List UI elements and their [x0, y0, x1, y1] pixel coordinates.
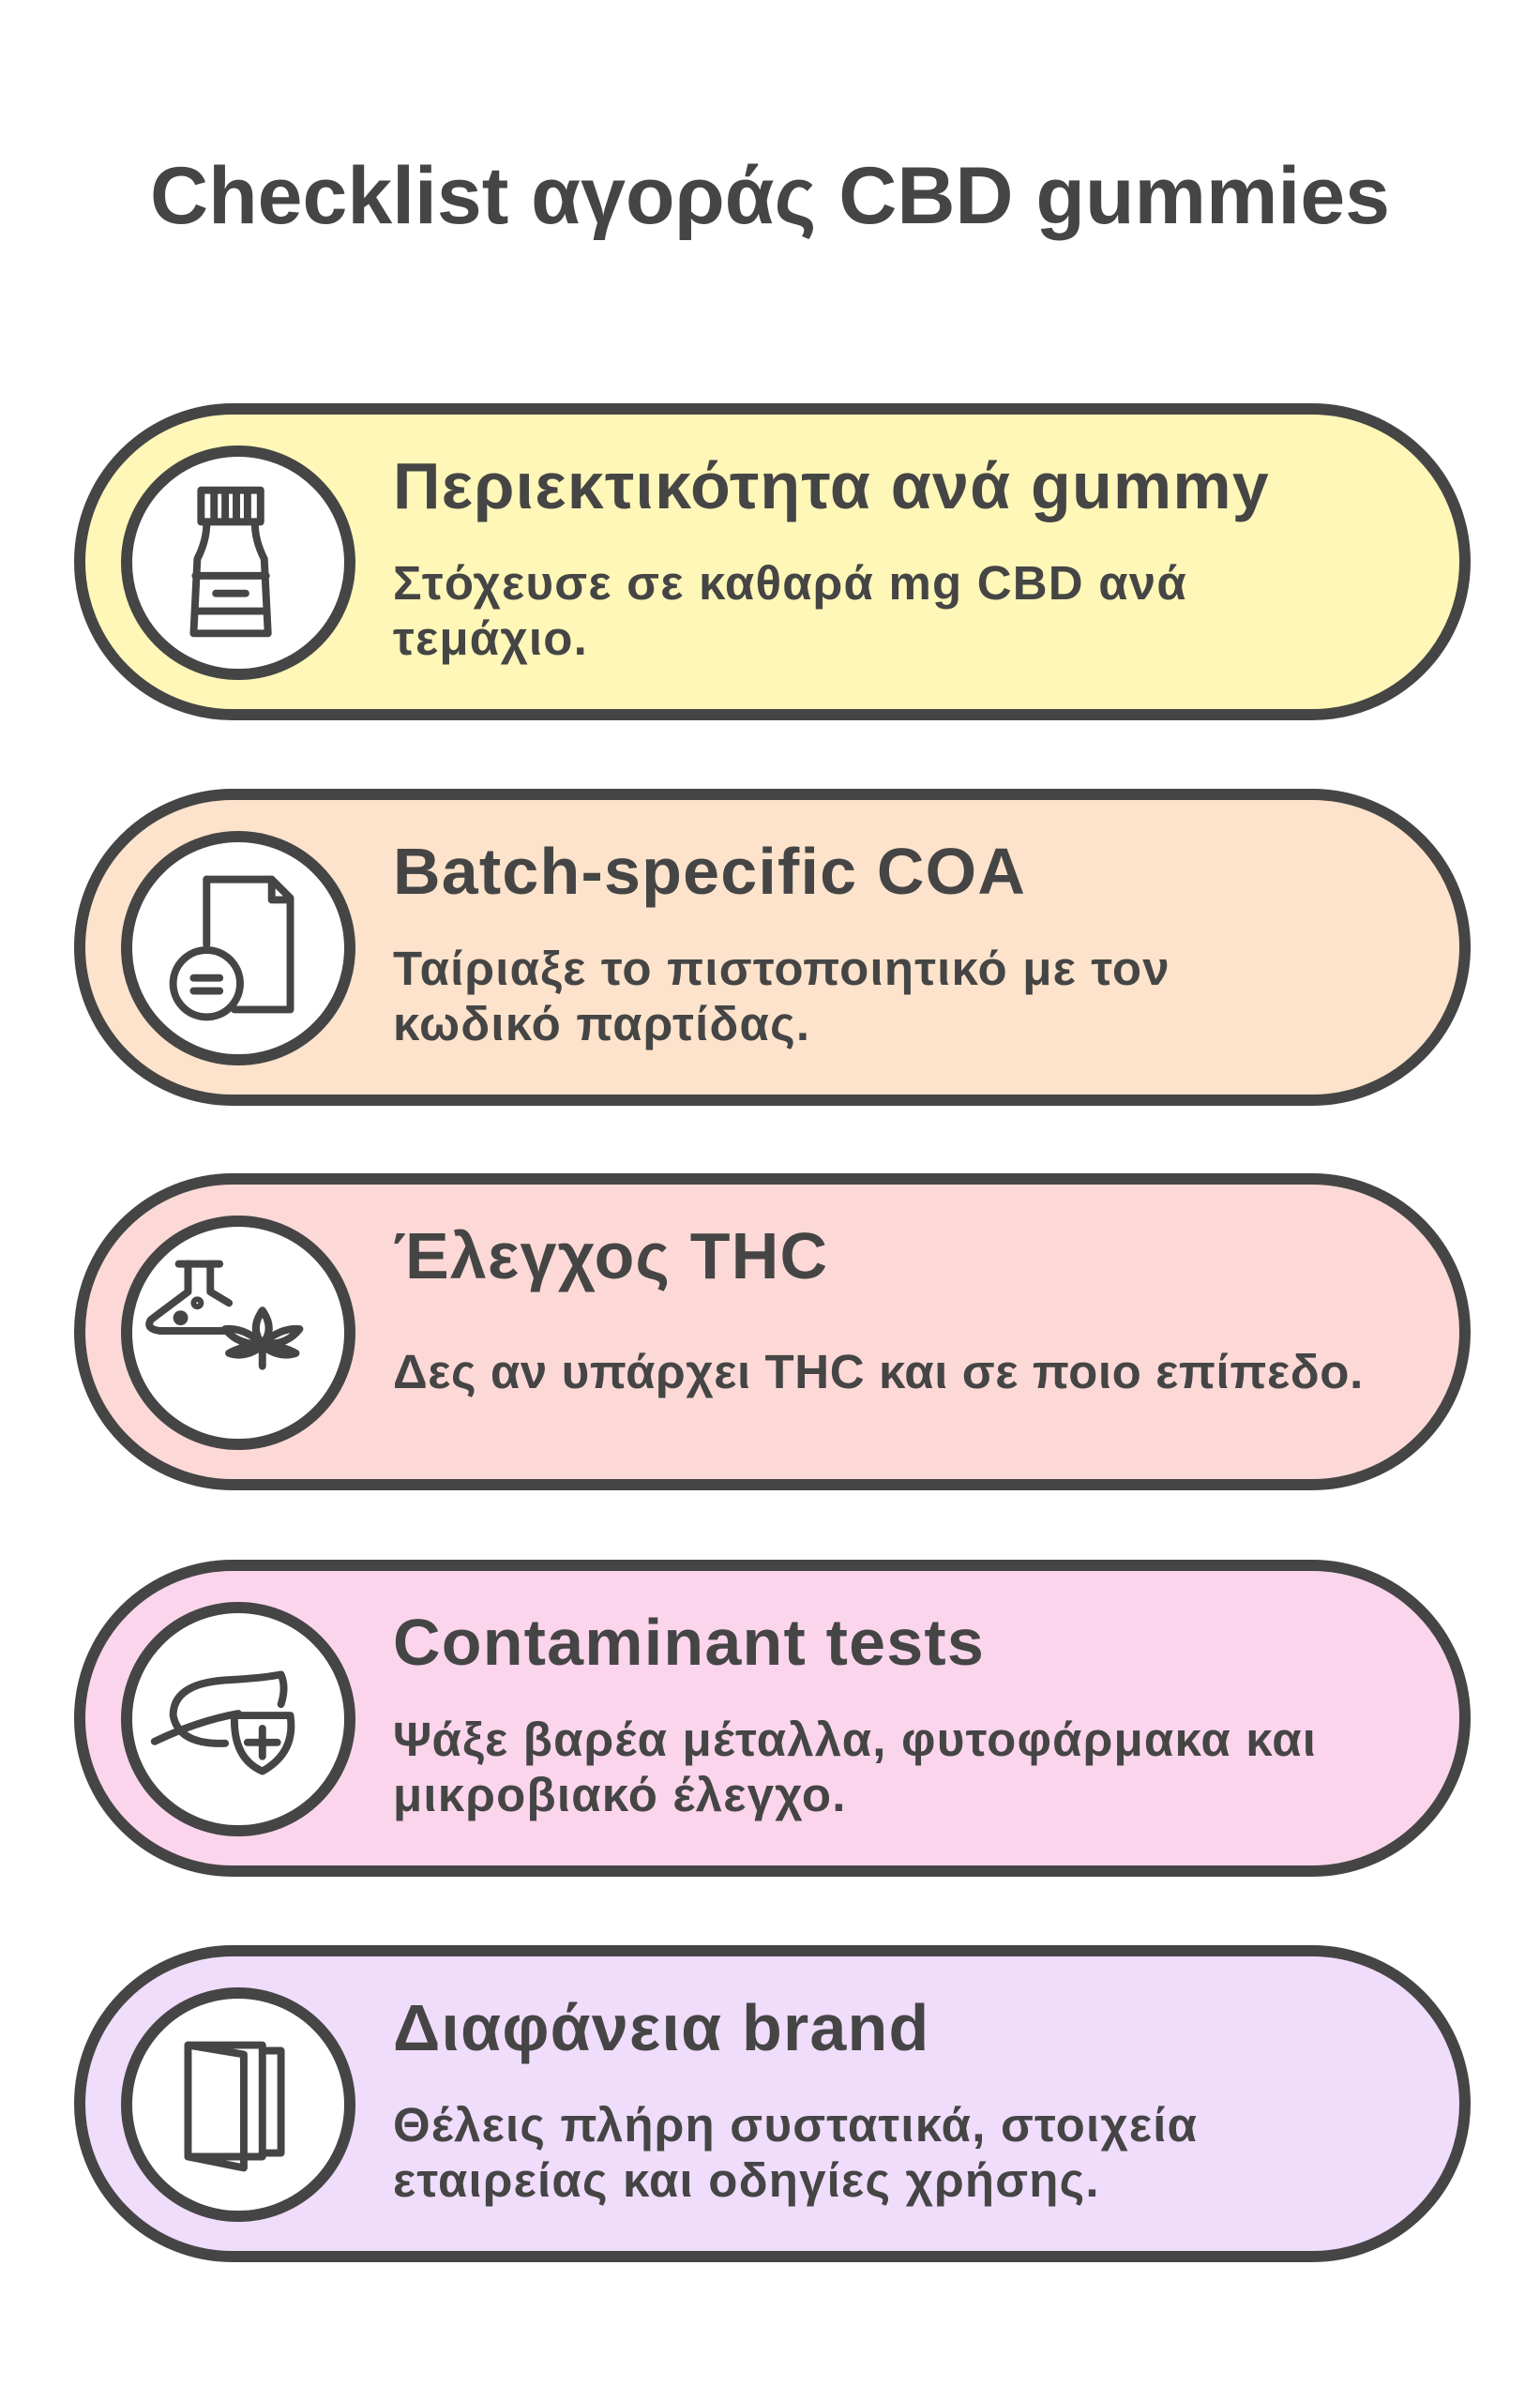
- text: Ταίριαξε το πιστοποιητικό με τον: [393, 942, 1170, 995]
- text: εταιρείας και οδηγίες χρήσης.: [393, 2153, 1100, 2207]
- panel: brand transparency: [74, 1945, 1471, 2262]
- text: κωδικό παρτίδας.: [393, 997, 810, 1050]
- icon: document: [121, 831, 355, 1065]
- panel: THC check: [74, 1173, 1471, 1490]
- heading: Περιεκτικότητα ανά gummy: [393, 449, 1270, 522]
- text: [393, 942, 1170, 1050]
- text: Ψάξε βαρέα μέταλλα, φυτοφάρμακα και: [393, 1713, 1317, 1766]
- title: Checklist αγοράς CBD gummies: [150, 151, 1390, 241]
- text: τεμάχιο.: [393, 612, 588, 665]
- heading: Contaminant tests: [393, 1606, 985, 1679]
- icon: flask and leaf: [121, 1216, 355, 1450]
- text: Στόχευσε σε καθαρά mg CBD ανά: [393, 556, 1187, 610]
- heading: Διαφάνεια brand: [393, 1991, 929, 2064]
- text: [393, 556, 1187, 665]
- text: Θέλεις πλήρη συστατικά, στοιχεία: [393, 2098, 1198, 2152]
- panel: content per gummy: [74, 403, 1471, 720]
- text: [393, 2098, 1198, 2207]
- heading: Batch-specific COA: [393, 835, 1026, 908]
- text: μικροβιακό έλεγχο.: [393, 1768, 847, 1821]
- panel: batch COA: [74, 789, 1471, 1106]
- text: [393, 1713, 1317, 1821]
- text: Δες αν υπάρχει THC και σε ποιο επίπεδο.: [393, 1345, 1364, 1398]
- icon: bottle: [121, 445, 355, 680]
- icon: leaf and shield: [121, 1602, 355, 1836]
- icon: folder/book: [121, 1987, 355, 2222]
- heading: Έλεγχος THC: [393, 1219, 828, 1292]
- panel: contaminant tests: [74, 1560, 1471, 1877]
